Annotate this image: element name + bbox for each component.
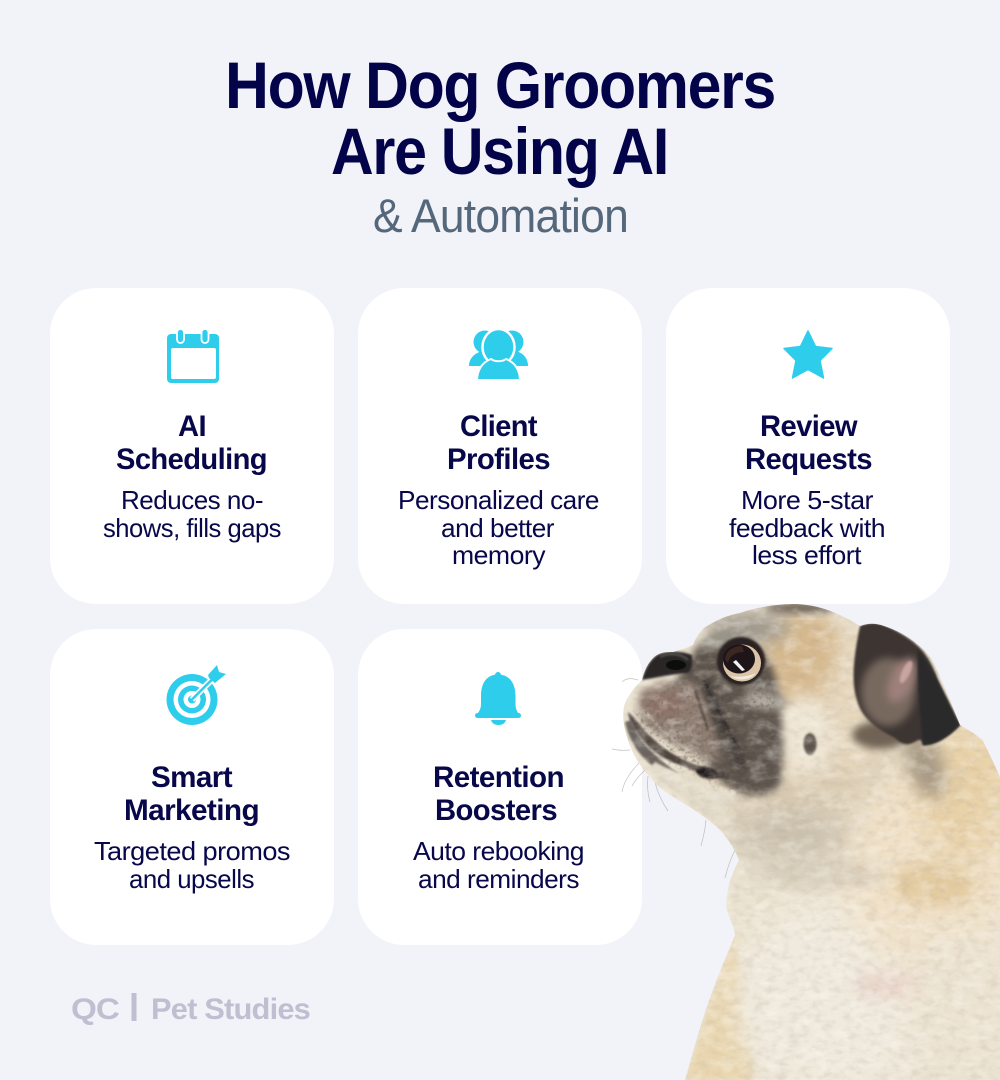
text: AI Scheduling description: Reduces no- [121, 485, 263, 515]
panel: Review Requests [666, 288, 950, 604]
heading: Review Requests: Requests [745, 443, 872, 476]
heading: Retention Boosters: Boosters [435, 794, 557, 827]
logo: QC Pet Studies [71, 993, 310, 1026]
text: Review Requests description: less effort [752, 540, 862, 570]
dog whiskers [612, 679, 735, 878]
text: Retention Boosters description [413, 836, 584, 894]
panel: Retention Boosters [358, 629, 642, 945]
text: Review Requests description: feedback with [729, 513, 885, 543]
text: Client Profiles description: and better [441, 513, 555, 543]
dog body and head [620, 600, 1000, 1080]
icon: calendar [167, 329, 219, 383]
title: Are Using AI [331, 114, 668, 188]
text: Retention Boosters description: and reminders [418, 864, 579, 894]
text: AI Scheduling description: shows, fills gaps [103, 513, 281, 543]
dog ear [852, 623, 960, 749]
illustration: pug dog [612, 600, 1000, 1080]
heading: Client Profiles: Profiles [447, 443, 550, 476]
heading: AI Scheduling [116, 410, 267, 476]
heading: Client Profiles: Client [460, 410, 538, 443]
dog muzzle speckles [633, 671, 778, 796]
text: Review Requests description [729, 485, 885, 570]
heading: Retention Boosters [433, 761, 564, 827]
text: Retention Boosters description: Auto rebooking [413, 836, 584, 866]
logo: QC Pet Studies: Pet Studies [151, 993, 310, 1026]
heading: Review Requests [745, 410, 872, 476]
heading: Review Requests: Review [760, 410, 858, 443]
dog fur tones [685, 602, 1000, 1080]
text: Client Profiles description: memory [452, 540, 545, 570]
icon: people [469, 329, 528, 382]
heading: Smart Marketing: Smart [151, 761, 233, 794]
text: Smart Marketing description: Targeted promos [94, 836, 291, 866]
heading: Retention Boosters: Retention [433, 761, 564, 794]
text: Smart Marketing description [94, 836, 291, 894]
heading: Client Profiles [447, 410, 550, 476]
panel: Client Profiles [358, 288, 642, 604]
dog eye [717, 637, 765, 685]
logo: QC Pet Studies: QC [71, 993, 119, 1026]
heading: Smart Marketing [124, 761, 259, 827]
icon: bell [475, 672, 521, 725]
dog muzzle mask [625, 628, 816, 818]
dog fur texture [620, 600, 1000, 1080]
panel: AI Scheduling [50, 288, 334, 604]
title: How Dog Groomers [225, 48, 775, 122]
text: Client Profiles description [398, 485, 599, 570]
dog nose [642, 652, 692, 680]
text: Smart Marketing description: and upsells [129, 864, 254, 894]
subtitle: & Automation [373, 189, 628, 242]
text: Client Profiles description: Personalized care [398, 485, 599, 515]
heading: Smart Marketing: Marketing [124, 794, 259, 827]
panel: Smart Marketing [50, 629, 334, 945]
text: AI Scheduling description [103, 485, 281, 543]
heading: AI Scheduling: Scheduling [116, 443, 267, 476]
text: Review Requests description: More 5-star [741, 485, 874, 515]
heading: AI Scheduling: AI [178, 410, 206, 443]
icon: target with arrow [166, 665, 226, 725]
title [225, 48, 775, 188]
icon: star [784, 331, 832, 378]
